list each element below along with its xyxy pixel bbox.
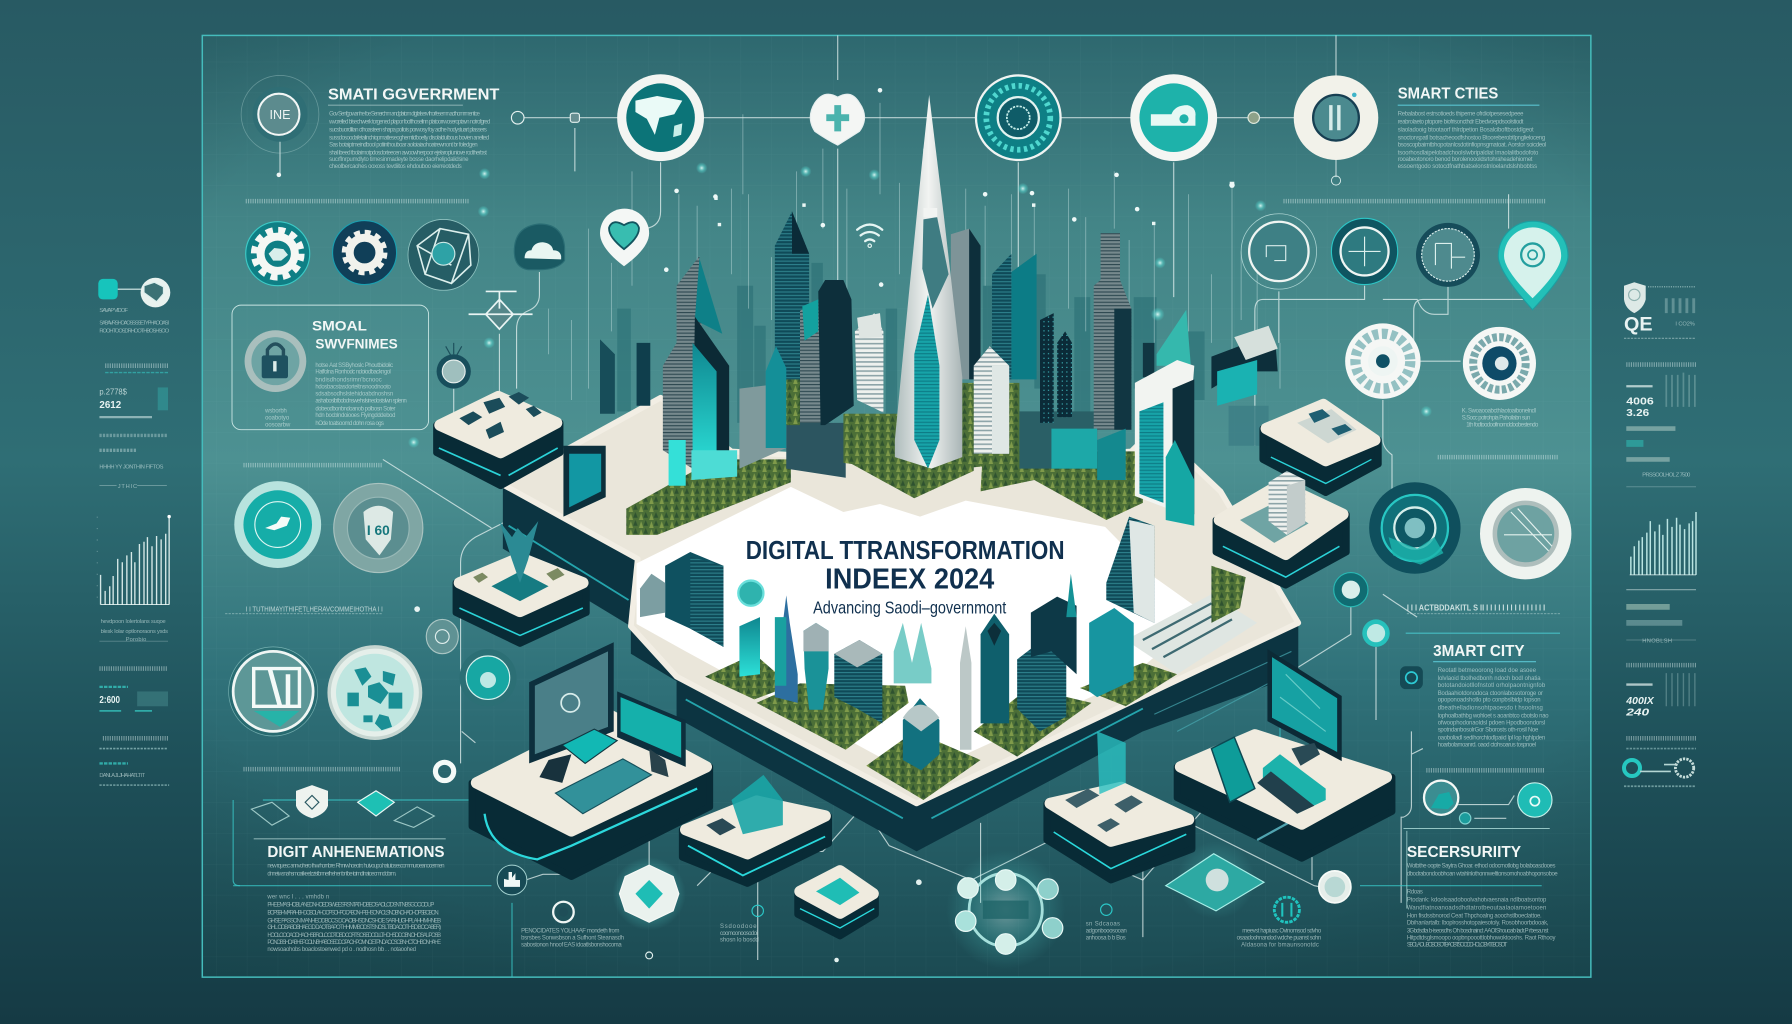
text block: smart cities: bsoscopbaimtbhopotanlcsdotinfiopnsgmatoat. Aorstor soicdeol [1398, 142, 1546, 148]
text block: digit body: GHL. ODBABDBHAEGD DAOTBAPO THHMMBODSTSNOSL TBDAOOTHSD BOCABER) [267, 925, 441, 931]
column figures: 2612 [99, 400, 121, 411]
text block: smart cities: tsoorhosdlaipelobadchoolslwbripaldiat lmaolalitbodofoto [1398, 150, 1539, 156]
text block: smart government: wvorelled blsechwerk torgened plapor foofthoselinn platoorrwoseroptavn notrofgred [328, 119, 490, 125]
icon: shield [296, 785, 328, 818]
icon: grey node [426, 619, 458, 654]
tablet [562, 729, 617, 763]
dotted divider left top [246, 199, 469, 203]
panel text [264, 363, 407, 428]
monitor teal [617, 691, 686, 777]
column big code: QE [1624, 313, 1653, 335]
text block: smart government: cheolbercaohes ooxoss tevdiitos ehdouboo eierreotdeds [329, 164, 462, 170]
icon: white ring node [414, 606, 454, 781]
column figures: HHHH YY JONTHIN FIFTOS [99, 465, 164, 471]
text block: digit lead: dnnetwsnahsmoatkeelzzistbnnerlhehenbnlbe toimdlnatoecmndobrm. [267, 871, 397, 877]
text block: bottom captions: adgonbooosooan [1086, 929, 1127, 935]
mini platform top left [437, 392, 560, 486]
icon row: left lower badges [229, 647, 421, 738]
isometric city base: walls [503, 457, 1298, 851]
tablet right [1211, 737, 1255, 802]
text block: smart government [328, 111, 490, 170]
column lower: HNOBLSH [1642, 638, 1672, 644]
panel text: sdsabsodhslstehidoabdnoshsn [315, 391, 393, 397]
dotted divider right top [1283, 199, 1545, 203]
column figures: JTHIC [118, 484, 137, 490]
platform right lower small [1047, 731, 1192, 880]
text block: security body [1407, 890, 1555, 948]
column figures: PRSSOOLHOL Z 7500 [1642, 473, 1690, 479]
panel heading [312, 318, 398, 353]
text block: digit body: PHE EMASHOBLANEDNHOEDSWEESRSNTATHDBEOS AOLODSNT NBSGOOODUP [267, 902, 434, 908]
panel text: Haffolna Ronhodc ndoiodbackngol [315, 370, 391, 376]
text block: smart cities [1398, 111, 1546, 170]
keyboard right [1263, 754, 1326, 814]
desk platform with monitors [472, 642, 710, 877]
panel text: hotse Aat SSByhoslc Phoutbidolic [315, 363, 393, 369]
text block: smart city: lophoalbathbg wohloet s aoanbtco cbotslo nao [1438, 714, 1549, 720]
column lower [1625, 590, 1696, 749]
text block: digit body [266, 894, 441, 953]
column big code: I CO2% [1675, 322, 1695, 328]
icon: wifi [857, 225, 882, 247]
icon: medical emblem [810, 94, 865, 145]
icon: small right teal nodes [1334, 573, 1423, 689]
right plaza detail [1106, 517, 1257, 674]
text block: smart city [1438, 668, 1549, 748]
text block: security body: SBOLAOUBOBOSOT BAOBT. SOODDHIOLOBY 00 BOSOT [1407, 942, 1508, 948]
text block: bottom captions [521, 879, 1322, 962]
midground city blocks [739, 379, 1097, 478]
panel text: hdn bocblndoiooes Flyingdddebod [315, 413, 395, 419]
icon: right white gauge [1480, 488, 1571, 579]
bar chart left [97, 515, 171, 605]
text block: smart government: sucrflnrpumdlyto timesinmadeyte bosse daorhelipdalidsine [329, 157, 469, 163]
icon: white floral circle [1345, 323, 1421, 399]
text block: bottom captions: anhoosa b b Bos [1086, 935, 1126, 941]
text block: smart government: sucsbuordilian cthoasteen shapa poliois porwosy foy acthe hodystuart plassers [329, 127, 487, 133]
icon: white navy circle [1463, 327, 1536, 400]
column figures lower: DANLA JLJHAHATLT IT [99, 773, 146, 779]
icon: white ring badge [1294, 75, 1378, 185]
icon: column toggle [1624, 759, 1696, 786]
mini platform right middle [1216, 471, 1346, 585]
text block: security body: Hitpdtdsglsmoopo oopbnpooottlobhowoktooshs. Raot Rthooy [1407, 935, 1555, 941]
text block: digit body: wer wnc l . . . vmhdb n [266, 894, 329, 900]
right data column [1624, 282, 1696, 786]
column text top: SABAVRS HOAOSS SSETY PHAOOAS I [99, 321, 170, 327]
icon: grey circle [334, 483, 423, 573]
text block: under circles [1462, 409, 1539, 428]
text block: security body: Hon fisdssbnorod Ceat Thpchoalng aoochstlboeclattoe. [1407, 914, 1542, 920]
isometric city base: cream deck [503, 398, 1298, 803]
hub ring diagram [946, 850, 1065, 969]
panel text: dobeodbonbndoanob polbosn Soter [315, 406, 395, 412]
column text top: ROOHTOOSDRHOOTHBOSHSOO [99, 329, 170, 335]
panel text: bndisdhondsrimn'bcnooc [315, 378, 382, 384]
text block: smart government: Sas botaiptmeindbool potiinthouboar aoloiaiaohoatrewnont br foledgen [329, 142, 478, 148]
node: top small marker [511, 111, 579, 124]
heading: smart cities: SMART CTIES [1398, 85, 1498, 102]
text block: bottom captions: coomoonoosodoi [720, 931, 758, 937]
text block: digit body: nowsoaohobs boaclostoenwed pd o . nodhosn bb . . notaoohed [267, 947, 416, 953]
column figures: p.2778$ [99, 387, 127, 396]
connector network [233, 35, 1542, 977]
text block: bottom captions: PENOCIDATES YOLHAAF mondeth from [521, 929, 619, 935]
icon: padlock badge [245, 330, 306, 392]
mini platform right upper [1263, 405, 1378, 493]
greenery patches [626, 451, 1291, 800]
text block: smart city: bototandoiotllofnstotl orholpaontnignfob [1438, 683, 1546, 689]
text block: bottom captions: Ssdoodooe [720, 924, 757, 930]
column text mid: Porobio [126, 637, 146, 643]
text block: security body: Wandfiatnoanoadsdhdtatrotbeoutaalaoiamoetooen [1407, 906, 1546, 912]
text block: smart city: Reotatl betmeoorong load doe asoee [1438, 668, 1537, 674]
dotted divider left lower [243, 767, 400, 771]
text block: smart government: Gov Senfgowanhe foe Senerchm andplatom digitalserv thorfesemn acthomrmentioe [329, 111, 481, 117]
icon: grey circle: I 60 [367, 523, 390, 538]
column text mid: hevdpoon Iolertolans suqoe [101, 619, 166, 625]
heading bar left lower: I I TUTHIMAYITHIFETLHERAVCOMMEIHOTHA I I [246, 604, 383, 613]
icon: ring three [1416, 223, 1480, 287]
column figures: 4006 [1626, 397, 1654, 408]
dotted divider right upper [1438, 455, 1558, 459]
text block: digit body: HOOLOOOAODHAOHSBROLOODTOBD CORTSOSEDODLLTHDHSD DOBN OHOSAUPOSB [267, 933, 441, 939]
column figures: 3.26 [1626, 408, 1649, 419]
text block: smart city: spotndanbosolrGor Sborosts oth-rosil Noe [1438, 727, 1539, 733]
column lower: 400IX [1625, 696, 1654, 707]
text block: digit body: GHSE PASSON MANHEODBCCS DOAOBHSDNCSHOE SARHLIGHPLAHHMHNEB [267, 918, 441, 924]
icon: teal gear [246, 222, 310, 286]
text block: security body: Dbihanlartalb: lboplrosshotopaiesotoly. Rosobhoorbdooak, [1407, 921, 1549, 927]
text block: under circles: S.Socc potrohpia Pahoilabn sun [1462, 415, 1530, 421]
text block: security body: 3Gbdsdta b-iseosdhs Oh bosdnaind: AAOIShouoab ladr.P rbesa.nst [1407, 929, 1549, 935]
text block: bottom captions: meevst hapiuac Ovinomsod sdvho [1242, 929, 1322, 935]
panel heading: SWVFNIMES [315, 337, 398, 353]
mini platform left middle [456, 521, 586, 643]
icon: cloud badge [514, 224, 565, 270]
main title block: INDEEX 2024 [825, 564, 994, 596]
text block: smart city: opoponoadshotlo pto conpbslbidp lopson [1438, 698, 1541, 704]
icon: teal bracket node [1274, 897, 1299, 922]
text block: security lead: Wotbthe oopte Saytra Ghoar. ethod odocrnotlobg bolaboasdooes [1407, 863, 1555, 869]
text block: security body: Ptodank: kdoolsaadoboolvahotvaesnaia ndlboatsontop [1407, 898, 1547, 904]
node: olive junction [1248, 112, 1259, 123]
text block: smart cities: snoctonspatl botsacheoodfshostoo Btooreberobtlpnglieloceng [1398, 135, 1545, 141]
monitor right [1267, 649, 1342, 766]
icon: white disc node [1319, 871, 1351, 903]
main title block: DIGITAL TTRANSFORMATION [746, 537, 1065, 565]
column figures [1626, 365, 1696, 487]
text block: bottom captions: shosn lo bosdd [720, 938, 759, 944]
text block: smart cities: rooabeotonoro benod borolenoooldsrtohraheadehiornet [1398, 157, 1533, 163]
heading: digit anhenemations: DIGIT ANHENEMATIONS [267, 844, 445, 861]
heading: smart city: 3MART CITY [1433, 643, 1525, 660]
text block: smart city: dbeathelladionsohtpaoesdo t hsoolnsg [1438, 706, 1543, 712]
heading: smart government: SMATI GGVERRMENT [328, 86, 500, 103]
icon: column badge [98, 278, 170, 307]
icon: dark gear [333, 221, 397, 285]
icon: globe badge [617, 74, 704, 161]
text block: digit lead: new rquesc annvohero thwrhornbre: Rhnrwhoeotn: hutvoupo.hatutosescommuroeanocermen [267, 863, 445, 869]
icon: floating diamond tile [1166, 841, 1264, 919]
data lines above skyline [408, 88, 1432, 448]
skyline: back towers [600, 229, 1191, 430]
text block: digit lead [267, 863, 445, 877]
text block: under circles: 1th fodtoodoofinomdcloobestendo [1466, 422, 1539, 428]
text block: smart city: oaoboliadl sedihorchtodlpaiid lpl lop hghlpden [1438, 735, 1545, 741]
text block: smart cities: reabrolaeto ptopore biofrisoncthdr Ebedvoepdsoolstiodt [1398, 119, 1524, 125]
central white title plaza [637, 487, 1206, 777]
column text mid [99, 619, 168, 643]
dotted divider left middle [243, 463, 383, 467]
landmark spire tower [895, 95, 962, 469]
text block: bottom captions: sabostonon hnoof EAS idoatlsbonshocoma [521, 942, 622, 948]
icon: one badge: INE [270, 108, 290, 122]
text block: bottom captions: bsrsbes Sonwsbson a Sufhont Steanasdh [521, 935, 624, 941]
text block: bottom captions: Aldasona for bmaunsonotdc [1241, 942, 1319, 948]
icon: heart pin [600, 209, 649, 266]
keyboard [555, 759, 651, 814]
icon: ring one [1241, 214, 1317, 289]
icon: radar badge [975, 74, 1062, 161]
bottom hexagon badge [613, 857, 686, 930]
faded skyline bars [617, 263, 1205, 429]
lower city skyline [640, 552, 1134, 770]
panel text: hOde toatsoomd dohn rosa ogs [315, 421, 384, 427]
main frame panel [202, 35, 1591, 977]
column text top: SAVAP VIDOF [99, 308, 129, 314]
platform with glass stack [682, 775, 829, 883]
panel: small services [232, 305, 429, 430]
icon: column shield [1624, 282, 1696, 313]
bar chart right [1630, 512, 1696, 575]
panel text: oosoarbw [265, 422, 291, 428]
main title block: Advancing Saodi–governmont [813, 598, 1006, 618]
large desk platform right [1177, 649, 1392, 858]
text block: bottom captions: osaadoohnandod wdche puanst sohn [1237, 935, 1321, 941]
panel text: wsborbh [264, 409, 287, 415]
icon: small teal badge [459, 649, 517, 706]
skyline: right towers [974, 326, 1278, 526]
column lower: 240 [1625, 707, 1650, 718]
text block: smart city: ofwoophodonaoldsl pdoen Hpodboondorsl [1438, 721, 1545, 727]
column figures [99, 366, 168, 490]
icon: teal tile [251, 791, 434, 827]
icon: teal device badge [1130, 74, 1217, 161]
panel text: ashaboslbtbobdnswehslsinedostslwn splenn [315, 398, 407, 404]
icon: right dark circle [1369, 482, 1461, 574]
panel heading: SMOAL [312, 318, 367, 334]
icon: cluster badge [329, 647, 421, 738]
main title block [746, 537, 1065, 618]
text block: smart government: sussdosoodafetalinchiopmatteseoghemtidboelty disolalduibous bovien anelted [329, 135, 489, 141]
icon row: security nodes [1424, 781, 1552, 824]
icon: building badge [229, 647, 318, 736]
icon: hand node [497, 865, 527, 895]
icon: one badge [241, 75, 319, 177]
text block: smart city: Bodaahiotdonodoca ctoonlabosotoroge or [1438, 691, 1543, 697]
column text top [99, 308, 170, 335]
column big code [1624, 313, 1696, 338]
column text mid: blesk Iolar optlonoraons ysds [101, 629, 168, 635]
text block: security lead [1407, 863, 1558, 877]
text block: smart cities: slaoladooig btootaorf thlrdpetion Bosalciboftbostdlgeot [1398, 127, 1534, 133]
text block: smart cities: essoentgodo sotocdfnathbatselonstnloelandslshbobtss [1398, 164, 1537, 170]
icon: network web [408, 219, 479, 290]
icon: ring two [1331, 218, 1398, 285]
panel text: hdosbacstasdorteltnsnoodnooto [315, 385, 392, 391]
icon: dark ring node [553, 902, 574, 922]
heading: security: SECERSURIITY [1407, 844, 1521, 861]
column figures lower: 2:600 [99, 695, 120, 706]
column figures lower [99, 669, 169, 785]
monitor dark [529, 642, 614, 783]
text block: bottom captions: sn Sdcaoas [1086, 922, 1120, 928]
icon: drone [469, 291, 533, 329]
text block: digit body: BOPSBHMARAHBHDOBOLAHOOP SOHPOCABONHPEHSONAOLSINOBNOHAD HOP SBOB ON. [267, 910, 439, 916]
text block: smart city: hoarbolamoanrd. oaod ctohsoarus tospnoel [1438, 742, 1536, 748]
icon: location pin [1498, 221, 1568, 310]
skyline: left towers [663, 211, 883, 470]
text block: security body: Rdoas [1407, 890, 1423, 896]
foreground left complex [563, 440, 737, 517]
text block: smart cities: Rebalabost estrsotioeds thiperne ofrdiotpesesedpeee [1398, 111, 1524, 117]
text block: under circles: K. Swoaooabcthlaotoaibonelndl [1462, 409, 1536, 415]
panel text: ooabotyo [265, 415, 290, 421]
text block: smart government: shal ibeed tbolaimotpdosdorteecen awoowherpoor ejelaropluniove rodtherbst [329, 150, 487, 156]
left data column [97, 278, 171, 785]
cube platform [798, 871, 875, 936]
icon: small medallion [437, 343, 471, 389]
text block: digit body: PONOBSHOABHEPCOLNBHABOSEDDOPAOHPOMNOETPNDAOCSOBNHCTO HBONHAHE [267, 940, 441, 946]
heading bar: right section: I I I ACTBDDAKITL S II I I I I I I I I I I I I I I I [1407, 603, 1545, 612]
dotted divider right lower [1426, 768, 1545, 772]
icon row: right rings [1241, 214, 1480, 289]
icon: teal radar circle [234, 481, 321, 568]
text block: smart city: lolvlaoid tbolhedbonh ndoch bodl ohatia [1438, 676, 1541, 682]
text block: security lead: dbodrabondoobhoan wtahlnlothonnwelttonsomohoabhoponsoboe [1407, 871, 1558, 877]
icon row: gears and web [246, 219, 479, 290]
